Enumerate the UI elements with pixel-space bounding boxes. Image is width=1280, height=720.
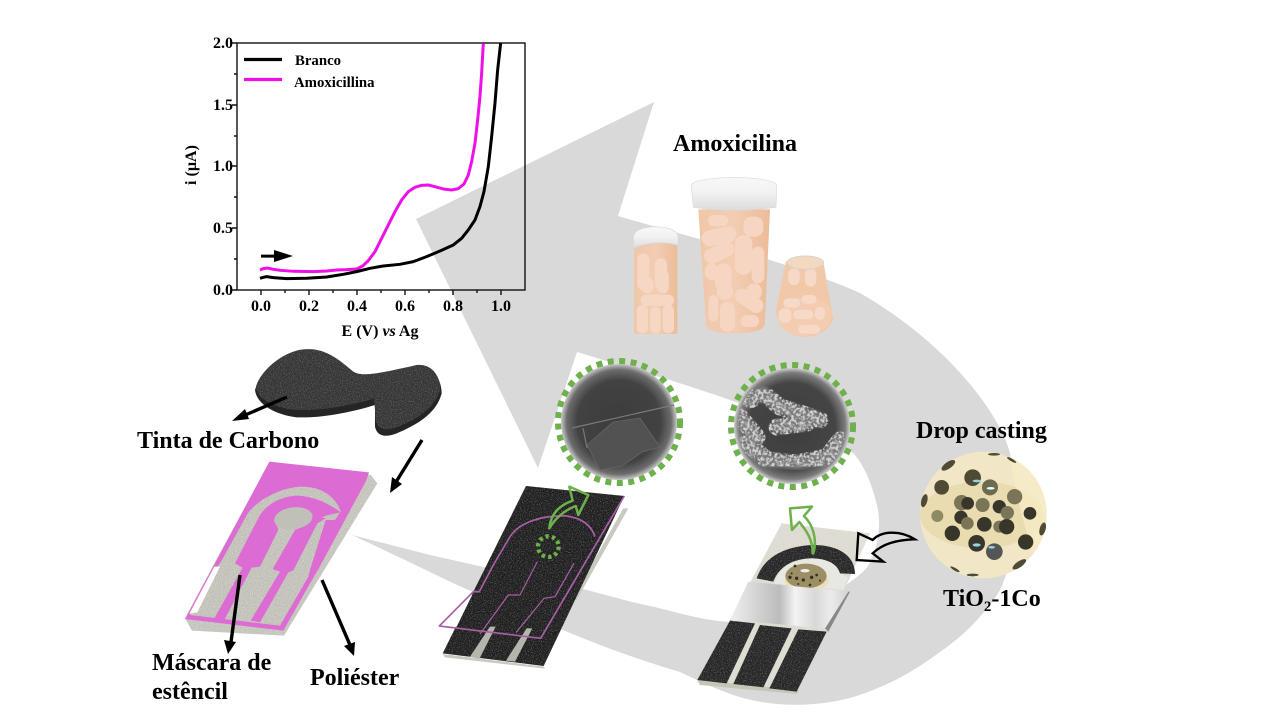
label: Poliéster: Poliéster: [310, 665, 400, 691]
carbon layer: [443, 486, 624, 666]
carbon tracks: [697, 621, 827, 692]
label: Máscara de estêncil: estêncil: [152, 679, 228, 705]
finished electrode with TiO2-1Co: [697, 507, 915, 694]
tilted bottle: [776, 256, 834, 340]
label: TiO2-1Co: -1Co: [991, 586, 1041, 612]
curve: amoxicillin: [260, 43, 483, 272]
crystal flake: [572, 405, 674, 470]
catalyst drop: [785, 564, 829, 591]
y axis tick labels: 1.5: [213, 97, 233, 114]
green arrow: [549, 487, 588, 528]
label: TiO2-1Co: TiO: [943, 586, 984, 612]
label: Drop casting: Drop casting: [916, 418, 1047, 444]
particle clusters: [740, 393, 840, 463]
polyester base: [185, 462, 377, 636]
arrow: polyester label: [322, 580, 355, 656]
y axis tick labels: 2.0: [213, 35, 233, 52]
pill bottles: [633, 177, 834, 340]
label: Tinta de Carbono: Tinta de Carbono: [137, 428, 319, 454]
x axis title: E (V) vs Ag: [342, 323, 418, 340]
arrow: carbon ink label: [232, 397, 287, 421]
green arrow: [790, 507, 815, 553]
y axis tick labels: 0.0: [213, 282, 233, 299]
big curved process arrow: [352, 102, 1015, 705]
pores: [920, 453, 1047, 576]
drop casting arrow: [857, 533, 915, 562]
SEM image: TiO2-1Co particles: [731, 365, 853, 487]
voltammogram chart: [183, 35, 525, 340]
insulating band: [730, 582, 848, 628]
y axis tick labels: [213, 35, 233, 299]
legend: Branco: [295, 53, 341, 69]
x axis tick labels: 1.0: [491, 298, 511, 315]
plot frame and ticks: [232, 43, 525, 295]
open area of stencil: [190, 487, 341, 626]
SEM image: bare carbon: [558, 361, 680, 483]
label: TiO2-1Co: 2: [984, 599, 991, 615]
white gap in stencil: [442, 594, 473, 627]
dashed border: [558, 361, 680, 483]
heading: Amoxicilina: Amoxicilina: [673, 131, 797, 157]
magenta stencil sheet: [185, 462, 369, 631]
polyester shadow: [572, 508, 628, 600]
arrow: stencil mask label: [224, 575, 240, 654]
label: Máscara de estêncil: [152, 650, 272, 705]
x axis tick labels: 0.0: [251, 298, 271, 315]
printed electrode with stencil: [439, 486, 628, 669]
x axis tick labels: 0.8: [443, 298, 463, 315]
x axis tick labels: 0.6: [395, 298, 415, 315]
stencil outline: [439, 496, 624, 638]
x axis tick labels: 0.4: [347, 298, 367, 315]
small dotted circle: [538, 536, 559, 557]
highlights: [973, 480, 995, 549]
x axis tick labels: [251, 298, 511, 315]
label: Máscara de estêncil: Máscara de: [152, 650, 272, 676]
y axis title: i (µA): [183, 145, 200, 185]
polyester base: [697, 523, 870, 693]
TiO2-1Co sphere: [920, 452, 1047, 578]
y axis tick labels: 0.5: [213, 220, 233, 237]
track gaps: [470, 627, 532, 662]
y axis tick labels: 1.0: [213, 158, 233, 175]
x axis tick labels: 0.2: [299, 298, 319, 315]
carbon ink blob: [255, 349, 442, 436]
legend: [244, 53, 375, 91]
scan direction arrow: [261, 250, 293, 262]
reference arc: [757, 545, 855, 582]
dashed border: [731, 365, 853, 487]
legend: Amoxicillina: [294, 75, 375, 91]
arrow: ink to stencil: [390, 440, 422, 493]
large bottle: [691, 177, 777, 333]
electrode traces: [214, 496, 341, 622]
stencil mask on polyester electrode: [185, 462, 377, 636]
working electrode opening: [273, 505, 314, 532]
white gap: [189, 567, 220, 614]
small bottle: [633, 227, 678, 334]
curve: blank: [260, 43, 501, 279]
working area: [773, 558, 848, 590]
